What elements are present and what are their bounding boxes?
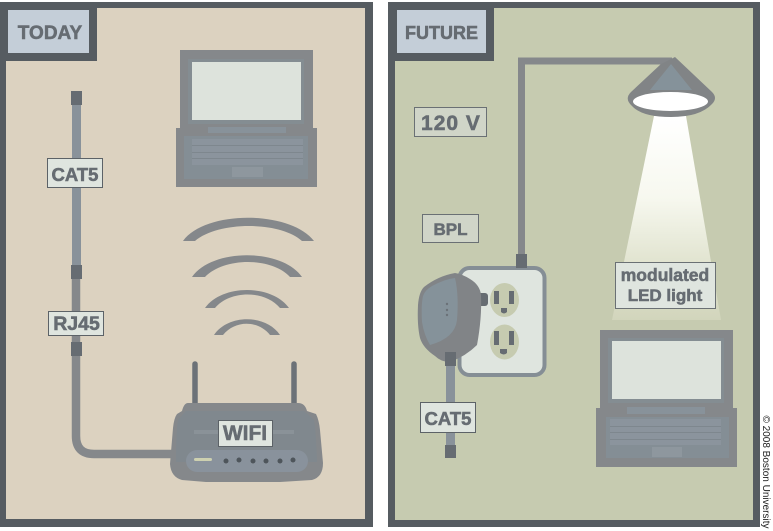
- icon: wifi waves: [183, 218, 314, 335]
- laptop: today: [176, 50, 317, 187]
- router: [170, 364, 323, 482]
- panel: today: [0, 2, 373, 527]
- socket: top: [490, 283, 519, 317]
- socket: bottom: [490, 324, 519, 360]
- label: cat5: [48, 158, 102, 188]
- panel: future: [388, 2, 760, 527]
- cable: cat5 future: [445, 352, 456, 458]
- label: modulated led light: modulated: [621, 265, 709, 285]
- label: bpl: [422, 214, 478, 242]
- label: modulated led light: LED light: [628, 286, 703, 305]
- label: wifi: WIFI: [223, 422, 267, 445]
- heading: future: [388, 2, 494, 61]
- bpl adapter: [418, 273, 488, 362]
- label: bpl: BPL: [434, 220, 468, 239]
- laptop: future: [596, 330, 737, 467]
- lamp: [628, 57, 715, 117]
- cable: cat5: [71, 91, 82, 266]
- label: modulated led light: [616, 262, 716, 308]
- label: cat5: CAT5: [52, 164, 98, 185]
- connector: rj45 cable: [71, 265, 175, 454]
- label: cat5 future: CAT5: [425, 408, 471, 429]
- light beam: [612, 116, 721, 320]
- label: cat5 future: [420, 402, 476, 432]
- label: 120 v: [414, 108, 486, 136]
- heading: future: FUTURE: [405, 23, 478, 43]
- outlet: [460, 254, 544, 375]
- heading: today: TODAY: [18, 23, 83, 44]
- label: 120 v: 120 V: [421, 112, 481, 135]
- label: rj45: RJ45: [53, 313, 100, 335]
- cable: power: [522, 61, 672, 260]
- credit: © 2008 Boston University: [760, 416, 771, 528]
- heading: today: [0, 2, 97, 61]
